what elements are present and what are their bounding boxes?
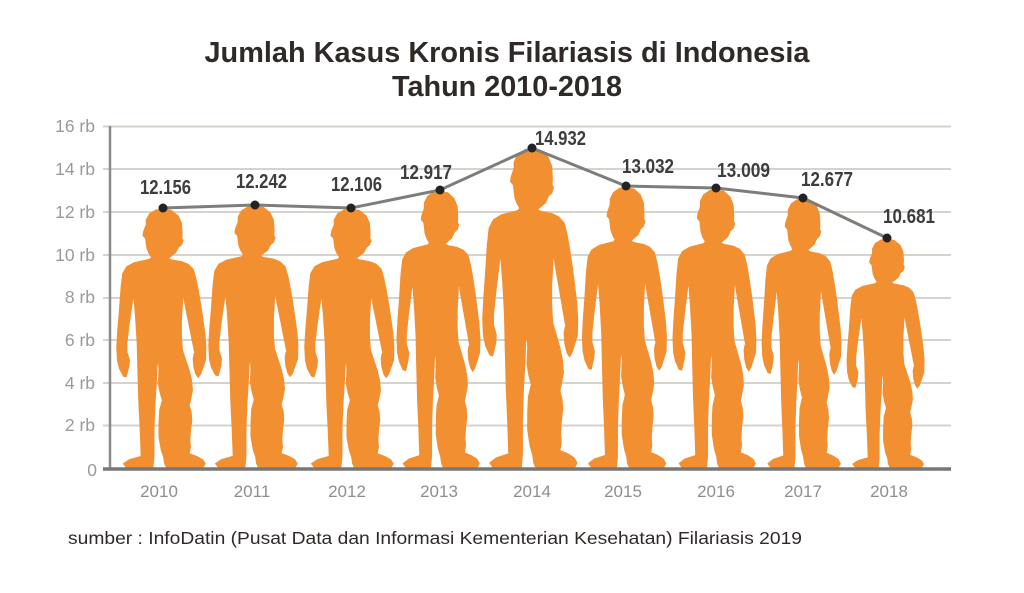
y axis labels: 2 rb	[65, 415, 95, 435]
human figures chart	[117, 149, 924, 467]
figure 2017	[762, 199, 841, 467]
x axis labels	[140, 482, 908, 501]
value labels: 13.032	[622, 156, 674, 178]
x axis labels: 2010	[140, 482, 178, 501]
figure 2015	[582, 188, 666, 467]
title	[204, 37, 811, 103]
y axis labels: 12 rb	[55, 202, 95, 222]
value labels: 10.681	[883, 206, 935, 228]
value labels: 12.106	[331, 174, 382, 196]
source note: sumber : InfoDatin (Pusat Data dan Informasi Kementerian Kesehatan) Filariasis 2019	[68, 528, 802, 548]
figure 2010	[117, 209, 206, 467]
y axis labels: 0	[87, 460, 97, 480]
x axis baseline	[103, 467, 951, 471]
y axis labels: 10 rb	[55, 245, 95, 265]
trend line	[163, 148, 887, 238]
x axis labels: 2017	[784, 482, 822, 501]
figure 2016	[673, 190, 756, 467]
title: Tahun 2010-2018	[392, 71, 622, 103]
y axis labels: 4 rb	[65, 373, 95, 393]
figure 2014	[483, 149, 578, 467]
y axis labels: 14 rb	[55, 159, 95, 179]
x axis labels: 2011	[234, 482, 270, 501]
y axis labels	[55, 116, 97, 480]
x axis labels: 2018	[870, 482, 908, 501]
value labels: 12.156	[140, 177, 191, 199]
figure 2011	[209, 206, 298, 467]
title: Jumlah Kasus Kronis Filariasis di Indonesia	[204, 37, 811, 69]
value labels	[140, 128, 935, 228]
y axis labels: 6 rb	[65, 330, 95, 350]
data points	[158, 144, 892, 242]
value labels: 12.917	[400, 162, 452, 184]
value labels: 14.932	[535, 128, 586, 150]
value labels: 13.009	[717, 160, 770, 182]
y axis labels: 8 rb	[65, 287, 95, 307]
y axis labels: 16 rb	[55, 116, 95, 136]
figure 2012	[305, 209, 394, 467]
x axis labels: 2015	[604, 482, 642, 501]
value labels: 12.677	[801, 169, 853, 191]
y axis line	[109, 126, 111, 469]
x axis labels: 2014	[513, 482, 551, 501]
figure 2013	[397, 191, 480, 467]
value labels: 12.242	[236, 171, 287, 193]
figure 2018	[847, 239, 924, 467]
x axis labels: 2013	[420, 482, 458, 501]
x axis labels: 2016	[697, 482, 735, 501]
x axis labels: 2012	[328, 482, 366, 501]
